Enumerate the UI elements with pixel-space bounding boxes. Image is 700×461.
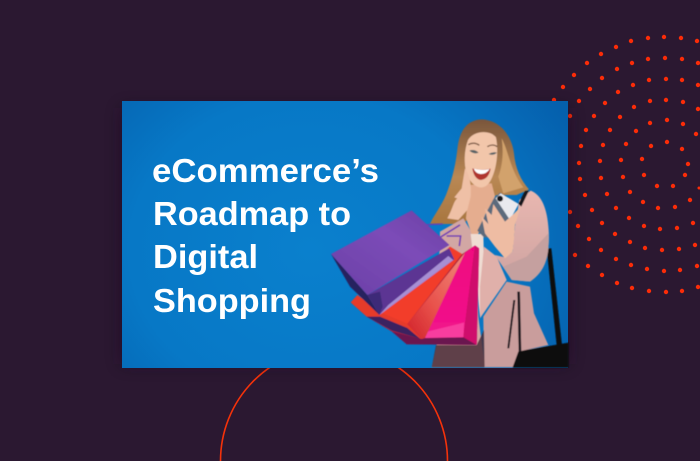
bag backing: [351, 246, 479, 345]
coat shoulder and sleeve: [495, 191, 549, 282]
purple bag: [331, 210, 449, 295]
neck and chest: [466, 183, 495, 234]
card shadow: [122, 108, 568, 364]
title: Roadmap to: [153, 195, 351, 232]
hair: [430, 119, 529, 224]
shopping bags: [331, 210, 479, 345]
title: [152, 152, 379, 319]
bag strap and handbag: [547, 248, 562, 345]
raised hand: [447, 168, 471, 220]
red outlined circle arc: [220, 347, 448, 461]
coat lower body: [432, 218, 485, 367]
title: Shopping: [153, 282, 311, 319]
title: Digital: [153, 238, 258, 275]
blue card: [122, 101, 568, 368]
pink bag: [425, 246, 475, 338]
title: eCommerce’s: [152, 152, 379, 189]
eyes and brows: [469, 150, 497, 155]
bag strings: [422, 224, 461, 246]
lapel: [480, 247, 507, 318]
hand holding phone: [482, 204, 521, 258]
inner top: [471, 234, 484, 317]
phone: [477, 193, 519, 237]
coat hem shadow: [432, 330, 485, 367]
face: [465, 132, 497, 187]
dotted circle pattern: [552, 35, 700, 294]
woman: [430, 119, 569, 368]
mouth: [472, 168, 491, 180]
photo: woman with shopping bags: [331, 119, 569, 368]
red bag: [351, 295, 422, 339]
hair highlight: [498, 138, 523, 193]
shoulder strap: [518, 191, 529, 207]
